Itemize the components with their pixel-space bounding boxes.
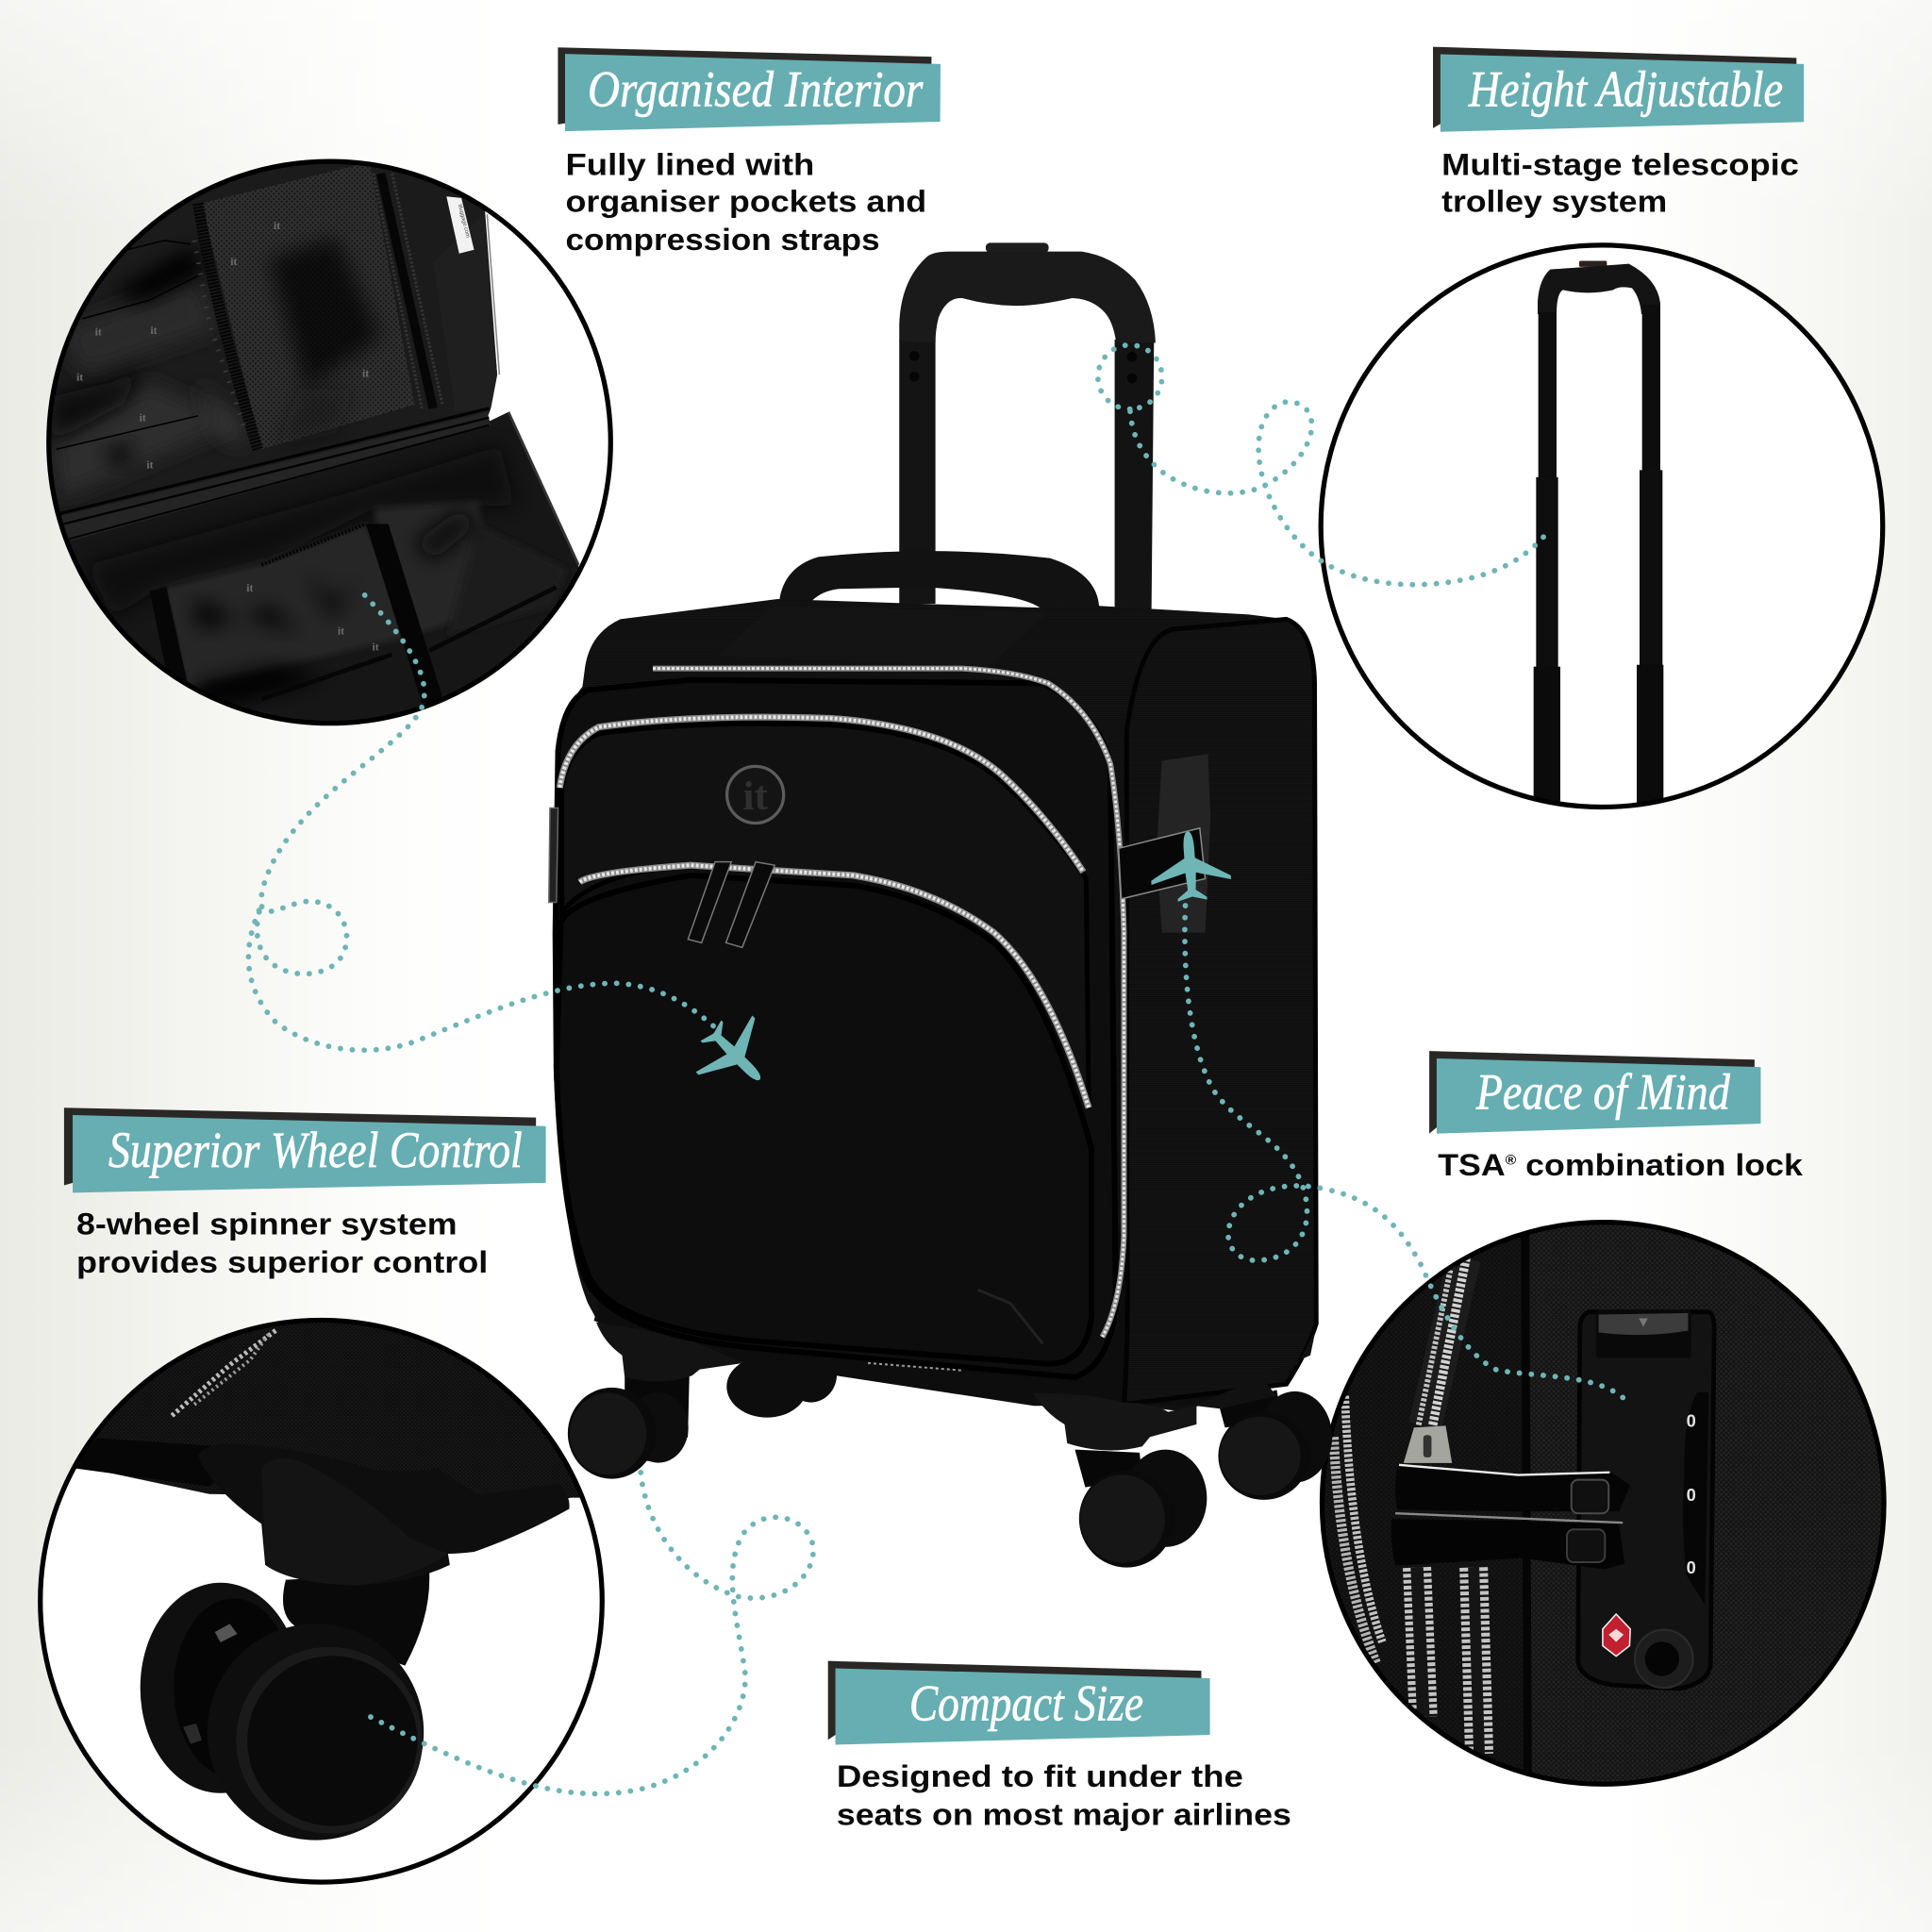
lining folds	[70, 286, 209, 368]
mesh pocket	[202, 162, 414, 449]
zipper tracks	[1425, 1257, 1464, 1425]
text: peace of mind: TSA	[1438, 1147, 1500, 1182]
brand label	[446, 196, 475, 254]
panel: interior detail circle: it	[150, 325, 158, 337]
heading: height adjustable	[1433, 47, 1804, 132]
dotted route: wheel to compact loop	[367, 1473, 813, 1794]
text: compact size: Designed to fit under the	[837, 1758, 1243, 1793]
panel: interior detail circle: it	[146, 458, 154, 471]
callout: peace of mind	[1429, 1051, 1804, 1182]
text: height adjustable	[1441, 146, 1799, 219]
fork	[283, 1573, 429, 1666]
text: organised interior	[566, 146, 926, 257]
heading: compact size: Compact Size	[909, 1674, 1143, 1731]
handle grip	[1579, 261, 1607, 267]
logo badge	[727, 766, 784, 823]
key dial	[1635, 1630, 1693, 1688]
panel: interior detail circle: it	[372, 641, 379, 654]
front perimeter	[556, 680, 1116, 1377]
heading: superior wheel control	[64, 1108, 546, 1192]
heading: organised interior: Organised Interior	[588, 60, 923, 117]
callout: compact size	[828, 1661, 1291, 1831]
front wheel	[208, 1624, 424, 1840]
left wheel mount	[596, 1323, 743, 1382]
panel: telescopic handle circle	[1321, 245, 1883, 824]
fabric base	[38, 1311, 623, 1512]
side panel	[1124, 619, 1316, 1405]
heading: organised interior	[558, 47, 941, 131]
mount plate	[198, 1443, 570, 1586]
text: height adjustable: trolley system	[1441, 184, 1667, 219]
lower pocket	[557, 875, 1091, 1364]
panel: interior detail circle: it	[246, 582, 253, 594]
callout: organised interior	[558, 47, 941, 257]
panel: interior detail circle: itluggage.com	[457, 204, 471, 239]
lock digits: 0	[1687, 1485, 1696, 1505]
panel: interior detail circle: it	[95, 325, 102, 338]
text: superior wheel control	[76, 1207, 488, 1279]
icon: plane on lock	[1148, 829, 1232, 904]
right wheel mounts	[868, 1330, 1316, 1451]
panel: TSA lock circle	[1321, 1217, 1884, 1788]
elastic ruching	[198, 203, 258, 449]
lock body	[1578, 1312, 1714, 1689]
carry handle	[778, 551, 1099, 608]
zipper pulls	[1395, 1467, 1630, 1511]
rear and front wheels	[568, 1346, 1332, 1568]
heading: superior wheel control: Superior Wheel Control	[108, 1122, 523, 1178]
lock digits	[1687, 1415, 1696, 1574]
panel: interior detail circle: it	[362, 368, 369, 380]
panel: interior detail circle: it	[230, 256, 238, 268]
left zip pull	[549, 808, 558, 902]
TSA mark	[1603, 1614, 1630, 1657]
text: compact size: seats on most major airlines	[837, 1796, 1291, 1831]
text: peace of mind: ®	[1506, 1153, 1517, 1168]
rear left wheels	[785, 1346, 837, 1403]
heading: peace of mind: Peace of Mind	[1475, 1064, 1730, 1121]
dotted route: handle to height circle	[1098, 345, 1547, 585]
text: organised interior: Fully lined with	[566, 146, 814, 181]
panel: interior detail circle: it	[274, 220, 280, 232]
lock digits: 0	[1687, 1410, 1696, 1430]
panel: interior detail circle: it	[338, 625, 344, 638]
text: organised interior: compression straps	[566, 222, 880, 257]
front right wheels	[1074, 1450, 1142, 1488]
heading: peace of mind	[1429, 1051, 1760, 1134]
telescopic handle	[899, 242, 1156, 613]
straps	[366, 524, 444, 703]
rear right wheels	[1220, 1390, 1282, 1427]
lock digits: 0	[1687, 1557, 1696, 1577]
front zip pulls	[688, 862, 731, 942]
panel: wheel circle	[38, 1311, 623, 1882]
back wheel	[141, 1583, 301, 1793]
suitcase	[549, 242, 1332, 1568]
panel: interior detail circle: it	[140, 412, 146, 425]
panel: interior detail circle: it	[76, 372, 83, 384]
lower crinkles	[164, 524, 410, 688]
text: peace of mind: combination lock	[1516, 1147, 1804, 1182]
logo badge: it	[742, 774, 768, 819]
front left wheels	[625, 1374, 690, 1462]
panel: interior detail circle	[38, 158, 610, 755]
upper pocket	[562, 724, 1089, 1108]
icon: plane on front pocket	[683, 1003, 788, 1108]
zippers	[559, 669, 1124, 1337]
text: height adjustable: Multi-stage telescopic	[1441, 146, 1799, 181]
callout: superior wheel control	[64, 1108, 546, 1279]
zip seam	[381, 174, 433, 408]
suitcase body	[556, 599, 1316, 1411]
callout: height adjustable	[1433, 47, 1804, 219]
text: superior wheel control: provides superior control	[76, 1244, 488, 1279]
lower body edge	[594, 1232, 1316, 1406]
side lock	[1157, 754, 1210, 933]
text: superior wheel control: 8-wheel spinner system	[76, 1207, 458, 1241]
heading: compact size	[828, 1661, 1210, 1744]
dotted route: lock plane to lock circle	[1185, 906, 1624, 1398]
zipper slider	[1404, 1425, 1452, 1463]
text: organised interior: organiser pockets and	[566, 184, 926, 219]
top panel	[718, 606, 1048, 666]
text: compact size	[837, 1758, 1291, 1831]
dotted route: interior to plane	[248, 595, 721, 1050]
lower panel	[67, 411, 579, 721]
heading: height adjustable: Height Adjustable	[1468, 60, 1783, 117]
